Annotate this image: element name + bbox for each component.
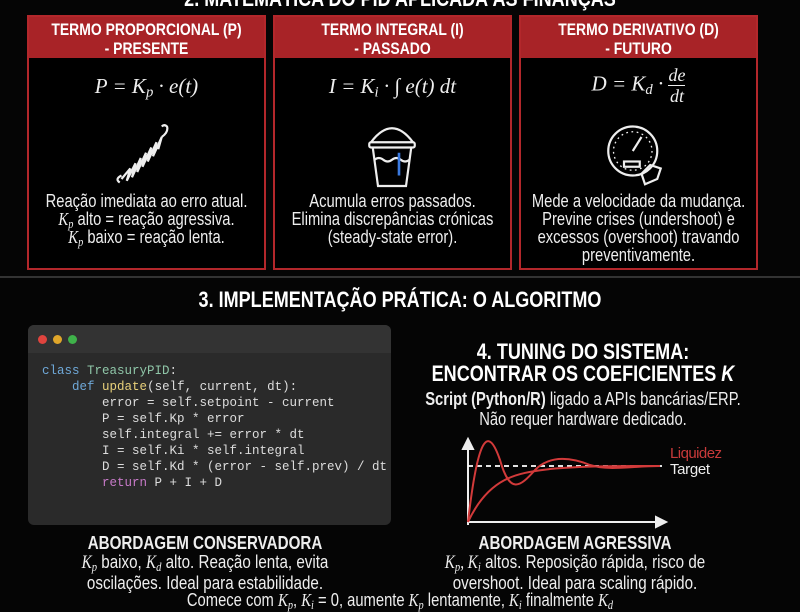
text I: Elimina discrepâncias crónicas — [292, 209, 493, 229]
icon: spring — [116, 124, 168, 184]
code window — [28, 325, 391, 525]
title: section 3: 3. IMPLEMENTAÇÃO PRÁTICA: O ALGORITMO — [199, 287, 601, 312]
formula P: P = Kp · e(t) — [95, 74, 198, 101]
footer cut off: Comece com Kp, Ki = 0, aumente Kp lentamente, Ki finalmente Kd — [187, 590, 613, 612]
icon: bucket — [368, 127, 416, 188]
panel: derivative — [519, 15, 758, 270]
text D: excessos (overshoot) travando — [538, 227, 739, 247]
text: script: Não requer hardware dedicado. — [479, 409, 687, 429]
text: aggressive: ABORDAGEM AGRESSIVA — [478, 532, 672, 553]
header D: TERMO DERIVATIVO (D) — [558, 20, 719, 39]
formula D: D = Kd · — [592, 71, 663, 98]
code: class TreasuryPID: def update(self, current, dt): error = self.setpoint - current P = self.Kp * error self.integral += error * dt I = self.Ki * self.integral D = self.Kd * (error - self.prev) / dt return P + I + D — [42, 364, 387, 490]
header P: TERMO PROPORCIONAL (P) — [51, 20, 242, 39]
formula I: I = Ki · ∫ e(t) dt — [329, 74, 456, 101]
text I — [292, 191, 493, 247]
window dots — [28, 325, 391, 353]
text: conservative: oscilações. Ideal para estabilidade. — [87, 572, 323, 593]
header D — [521, 17, 756, 58]
chart: response curves — [461, 436, 722, 529]
legend: Liquidez — [670, 445, 722, 462]
formula D — [591, 65, 686, 106]
text D: preventivamente. — [582, 245, 695, 265]
formula D: dt — [670, 86, 684, 106]
header I — [275, 17, 510, 58]
text I: (steady-state error). — [328, 227, 457, 247]
text: aggressive — [444, 532, 705, 593]
panel: proportional — [27, 15, 266, 270]
header I: - PASSADO — [354, 39, 431, 58]
text: aggressive: overshoot. Ideal para scaling rápido. — [453, 572, 697, 593]
title: section 4: ENCONTRAR OS COEFICIENTES K — [432, 361, 734, 386]
header I: TERMO INTEGRAL (I) — [321, 20, 464, 39]
panel: integral — [273, 15, 512, 270]
text D: Previne crises (undershoot) e — [542, 209, 735, 229]
text P: Kp alto = reação agressiva. — [58, 209, 235, 231]
icon: speedometer — [607, 125, 662, 186]
title: section 4: 4. TUNING DO SISTEMA: — [477, 339, 689, 364]
formula D: de — [668, 65, 685, 85]
text P — [46, 191, 247, 249]
text: conservative: ABORDAGEM CONSERVADORA — [88, 532, 322, 553]
title: section 4 — [432, 339, 736, 386]
text: conservative: Kp baixo, Kd alto. Reação lenta, evita — [82, 551, 328, 574]
text P: Reação imediata ao erro atual. — [46, 191, 247, 211]
text D: Mede a velocidade da mudança. — [532, 191, 745, 211]
text D — [532, 191, 745, 265]
text: script — [425, 389, 741, 429]
text P: Kp baixo = reação lenta. — [68, 227, 225, 249]
text: aggressive: Kp, Ki altos. Reposição rápida, risco de — [445, 551, 705, 574]
header P: - PRESENTE — [105, 39, 188, 58]
header P — [29, 17, 264, 58]
text I: Acumula erros passados. — [309, 191, 476, 211]
text: conservative — [81, 532, 328, 593]
chart: response curves: Target — [670, 461, 711, 478]
text: script: Script (Python/R) ligado a APIs bancárias/ERP. — [425, 389, 741, 409]
header D: - FUTURO — [605, 39, 672, 58]
